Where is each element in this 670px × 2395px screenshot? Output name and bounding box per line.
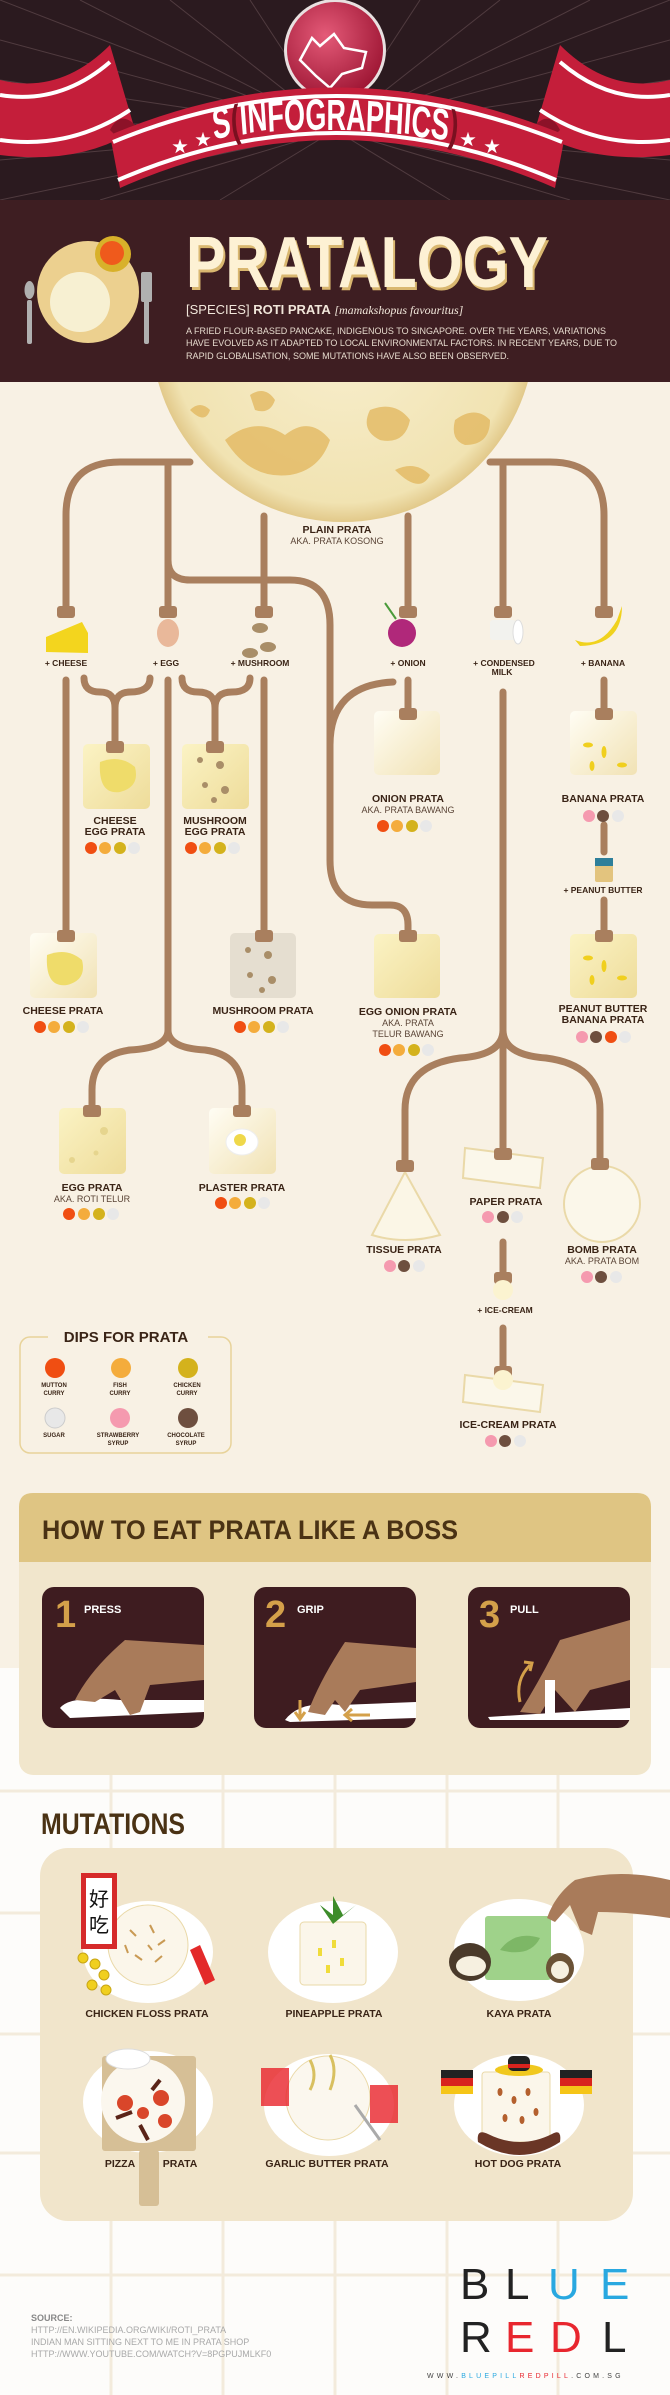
card: egg prata [54, 1108, 131, 1220]
card: egg onion prata: TELUR BAWANG [372, 1029, 444, 1039]
card: cheese prata: CHEESE PRATA [23, 1005, 104, 1017]
icon: peanut butter jar and label [563, 858, 643, 895]
ribbon banner with title S(INFOGRAPHICS) [0, 45, 670, 188]
card: plaster prata: PLASTER PRATA [199, 1182, 286, 1194]
heading: PRATALOGY: PRATALOGY [186, 223, 548, 303]
mutation: pineapple prata: PINEAPPLE PRATA [285, 2008, 383, 2020]
hands on result cards [57, 708, 613, 1378]
step 2: grip [254, 1587, 416, 1728]
card: bomb prata: BOMB PRATA [567, 1244, 637, 1256]
icon: ice-cream scoop and label: + ICE-CREAM [477, 1305, 533, 1315]
description: HAVE EVOLVED AS IT ADAPTED TO LOCAL ENVIRONMENTAL FACTORS. IN RECENT YEARS, DUE TO [186, 338, 617, 349]
panel: dips for prata legend: SYRUP [176, 1441, 196, 1447]
icon: mushroom [242, 623, 276, 658]
logo: blue pill red pill [427, 2260, 629, 2380]
mutation: pizza prata [83, 2049, 213, 2206]
panel: dips for prata legend: CURRY [109, 1391, 131, 1397]
card: banana prata: BANANA PRATA [562, 793, 645, 805]
card: onion prata [361, 711, 455, 832]
panel: mutations [40, 1848, 670, 2221]
ribbon banner with title S(INFOGRAPHICS): ★ [172, 139, 188, 156]
card: bomb prata [564, 1166, 640, 1283]
card: egg onion prata [359, 934, 458, 1056]
panel: dips for prata legend: DIPS FOR PRATA [64, 1329, 188, 1346]
panel: dips for prata legend [20, 1326, 231, 1453]
mutation: chicken floss prata: 吃 [89, 1914, 109, 1937]
sources text: SOURCE: [31, 2313, 73, 2323]
logo: blue pill red pill: E [600, 2260, 629, 2309]
mutation: pineapple prata [268, 1896, 398, 2020]
species line: [SPECIES] ROTI PRATA [mamakshopus favouritus] [186, 302, 464, 317]
ingredient labels [45, 658, 625, 677]
step 1: press: 1 [55, 1594, 76, 1636]
background: white tiled lower area [0, 1668, 670, 2395]
icon: peanut butter jar and label: + PEANUT BUTTER [563, 885, 643, 895]
card: egg onion prata: EGG ONION PRATA [359, 1006, 458, 1018]
logo: blue pill red pill: B [460, 2260, 489, 2309]
label: plain prata: AKA. PRATA KOSONG [290, 536, 384, 546]
mutation: hot dog prata [441, 2054, 592, 2170]
card: banana prata [562, 711, 645, 822]
step 3: pull: 3 [479, 1594, 500, 1636]
mutation: garlic butter prata: GARLIC BUTTER PRATA [265, 2158, 389, 2170]
logo: blue pill red pill: U [548, 2260, 580, 2309]
plain prata (big pancake) [151, 138, 535, 522]
sources text: HTTP://WWW.YOUTUBE.COM/WATCH?V=8PGPUJMLKF0 [31, 2349, 271, 2359]
panel: dips for prata legend: SYRUP [108, 1441, 128, 1447]
panel: dips for prata legend: CURRY [176, 1391, 198, 1397]
icon: cheese [46, 622, 88, 653]
panel: dips for prata legend: STRAWBERRY [97, 1433, 139, 1439]
card: plaster prata [199, 1108, 286, 1209]
card: ice-cream prata: ICE-CREAM PRATA [459, 1419, 557, 1431]
icon: Singapore globe [284, 0, 386, 101]
panel: dips for prata legend: MUTTON [41, 1383, 67, 1389]
step 3: pull [468, 1587, 630, 1728]
ribbon banner with title S(INFOGRAPHICS): ★ [460, 132, 476, 149]
icon: egg [157, 619, 179, 647]
card: mushroom prata [212, 933, 314, 1033]
mutation: kaya prata: KAYA PRATA [487, 2008, 552, 2020]
ingredient labels: + MUSHROOM [231, 658, 289, 668]
mutation: chicken floss prata: CHICKEN FLOSS PRATA [85, 2008, 209, 2020]
card: cheese prata [23, 933, 104, 1033]
label: plain prata [290, 524, 384, 546]
ingredient icons row [46, 603, 622, 658]
card: cheese egg prata: EGG PRATA [85, 826, 146, 838]
card: peanut butter banana prata: PEANUT BUTTER [559, 1003, 648, 1015]
step 1: press [42, 1587, 204, 1728]
card: ice-cream prata [459, 1370, 557, 1447]
card: mushroom egg prata: EGG PRATA [185, 826, 246, 838]
icon: banana [575, 606, 622, 646]
card: tissue prata [366, 1172, 442, 1272]
mutation: pizza prata: PRATA [163, 2158, 198, 2170]
step 3: pull: PULL [510, 1604, 539, 1616]
ingredient labels: + CONDENSED [473, 658, 535, 668]
card: onion prata: ONION PRATA [372, 793, 444, 805]
sources text: INDIAN MAN SITTING NEXT TO ME IN PRATA SHOP [31, 2337, 249, 2347]
card: mushroom egg prata [182, 744, 249, 854]
panel: dips for prata legend: CHICKEN [173, 1383, 201, 1389]
card: egg prata: EGG PRATA [62, 1182, 123, 1194]
heading: mutations: MUTATIONS [41, 1808, 185, 1841]
icon: onion [385, 603, 416, 647]
logo: blue pill red pill: L [602, 2313, 626, 2362]
mutation: kaya prata [449, 1899, 584, 2020]
family tree branches [66, 462, 604, 1368]
icon: plate with prata and curry [24, 236, 152, 344]
card: egg prata: AKA. ROTI TELUR [54, 1194, 131, 1204]
description [186, 326, 617, 362]
mutation: chicken floss prata: 好 [89, 1888, 109, 1911]
mutation: garlic butter prata [261, 2054, 398, 2170]
ribbon banner with title S(INFOGRAPHICS): ★ [195, 132, 211, 149]
ribbon banner with title S(INFOGRAPHICS): ★ [484, 139, 500, 156]
panel: dips for prata legend: FISH [113, 1383, 127, 1389]
card: onion prata: AKA. PRATA BAWANG [361, 805, 455, 815]
ingredient labels: + ONION [390, 658, 426, 668]
icon: ice-cream scoop and label [477, 1280, 533, 1315]
step 2: grip: GRIP [297, 1604, 324, 1616]
card: egg onion prata: AKA. PRATA [382, 1018, 434, 1028]
step 1: press: PRESS [84, 1604, 121, 1616]
card: peanut butter banana prata [559, 934, 648, 1043]
label: plain prata: PLAIN PRATA [302, 524, 372, 536]
ingredient labels: + CHEESE [45, 658, 87, 668]
card: cheese egg prata [83, 744, 150, 854]
hands on lines [57, 606, 613, 618]
logo: blue pill red pill: R [460, 2313, 492, 2362]
card: paper prata [463, 1148, 543, 1223]
card: mushroom prata: MUSHROOM PRATA [212, 1005, 314, 1017]
header: dark sunburst band [0, 0, 670, 200]
ingredient labels: + EGG [153, 658, 179, 668]
card: bomb prata: AKA. PRATA BOM [565, 1256, 639, 1266]
title band: PRATALOGY [0, 200, 670, 382]
mutation: hot dog prata: HOT DOG PRATA [475, 2158, 562, 2170]
description: RAPID GLOBALISATION, SOME MUTATIONS HAVE ALSO BEEN OBSERVED. [186, 351, 509, 362]
card: cheese egg prata: CHEESE [93, 815, 137, 827]
sources text: HTTP://EN.WIKIPEDIA.ORG/WIKI/ROTI_PRATA [31, 2325, 226, 2335]
panel: how to eat prata like a boss [19, 1493, 651, 1775]
ingredient labels: + BANANA [581, 658, 625, 668]
panel: dips for prata legend: CHOCOLATE [167, 1433, 205, 1439]
sources text [31, 2313, 271, 2359]
heading: PRATALOGY: PRATALOGY [188, 226, 550, 306]
description: A FRIED FLOUR-BASED PANCAKE, INDIGENOUS TO SINGAPORE. OVER THE YEARS, VARIATIONS [186, 326, 606, 337]
icon: condensed milk [490, 620, 523, 644]
logo: blue pill red pill: WWW.BLUEPILLREDPILL.COM.SG [427, 2373, 624, 2380]
step 2: grip: 2 [265, 1594, 286, 1636]
card: peanut butter banana prata: BANANA PRATA [562, 1014, 645, 1026]
heading: HOW TO EAT PRATA LIKE A BOSS [42, 1515, 458, 1545]
ribbon banner with title S(INFOGRAPHICS): S(INFOGRAPHICS) [207, 91, 464, 151]
card: mushroom egg prata: MUSHROOM [183, 815, 247, 827]
mutation: pizza prata: PIZZA [105, 2158, 136, 2170]
card: tissue prata: TISSUE PRATA [366, 1244, 442, 1256]
icon: reaching hand [547, 1874, 670, 1935]
card: paper prata: PAPER PRATA [470, 1196, 543, 1208]
panel: dips for prata legend: CURRY [43, 1391, 65, 1397]
mutation: chicken floss prata [78, 1873, 215, 2020]
ingredient labels: MILK [492, 667, 513, 677]
panel: dips for prata legend: SUGAR [43, 1433, 65, 1439]
logo: blue pill red pill: D [550, 2313, 582, 2362]
logo: blue pill red pill: L [505, 2260, 529, 2309]
logo: blue pill red pill: E [505, 2313, 534, 2362]
